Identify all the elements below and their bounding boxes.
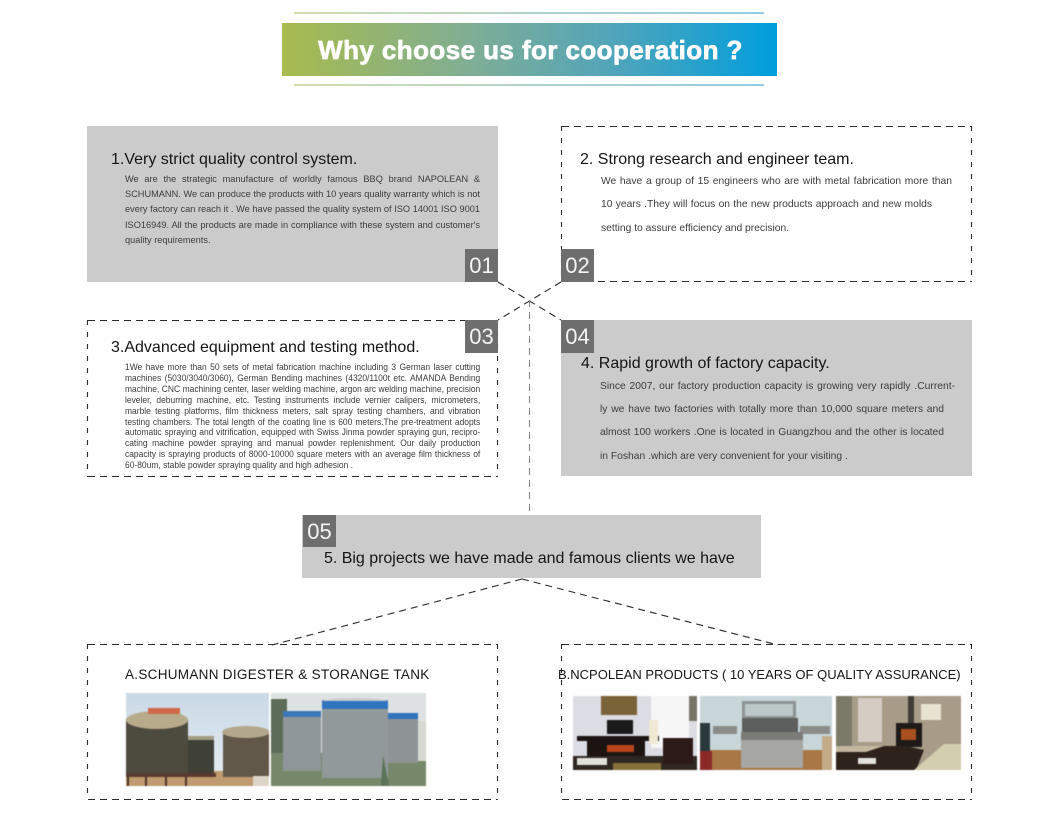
body text 1: SCHUMANN. We can produce the products with 10 years quality warranty which is not <box>125 189 480 200</box>
body text 1: ISO16949. All the products are made in compliance with these system and customer's <box>125 220 480 231</box>
body text 2 <box>601 176 952 234</box>
body text 1: every factory can reach it . We have passed the quality system of ISO 14001 ISO 9001 <box>125 204 480 215</box>
photo: stainless BBQ grill <box>699 696 833 771</box>
number 02: 02 <box>565 253 590 278</box>
body text 2: We have a group of 15 engineers who are with metal fabrication more than <box>601 176 952 187</box>
body text 3: cating machine powder spraying and manual powder replenishment. Our daily production <box>125 438 480 448</box>
body text 3: testing chambers. The total length of the coating line is 600 meters.The pre-treatment adopts <box>125 417 480 427</box>
number 03 <box>465 320 498 353</box>
panel 4: capacity <box>561 320 972 476</box>
number 03: 03 <box>469 324 494 349</box>
heading 2: 2. Strong research and engineer team. <box>580 151 854 168</box>
number 01: 01 <box>469 253 494 278</box>
number 04 <box>561 320 594 353</box>
heading B: B.NCPOLEAN PRODUCTS ( 10 YEARS OF QUALITY ASSURANCE) <box>558 667 961 682</box>
title banner <box>282 23 777 76</box>
heading 3: 3.Advanced equipment and testing method. <box>111 339 420 356</box>
number 01 <box>465 249 498 282</box>
number 05: 05 <box>307 519 332 544</box>
heading 4: 4. Rapid growth of factory capacity. <box>581 355 830 372</box>
body text 3: automatic spraying and vitrification, equipped with Swiss Jinma powder spraying gun, recipro- <box>125 427 480 437</box>
number 04: 04 <box>565 324 590 349</box>
number 02 <box>561 249 594 282</box>
body text 3 <box>125 362 480 470</box>
body text 4: almost 100 workers .One is located in Guangzhou and the other is located <box>600 427 944 438</box>
photo: electric fireplace room <box>572 695 698 771</box>
number 05 <box>303 515 336 547</box>
body text 3: 60-80um, stable powder spraying quality and high adhesion . <box>125 460 353 470</box>
heading A: A.SCHUMANN DIGESTER & STORANGE TANK <box>125 667 430 682</box>
body text 4: ly we have two factories with totally more than 10,000 square meters and <box>600 404 944 415</box>
body text 1: quality requirements. <box>125 235 211 246</box>
panel 5: big projects <box>302 515 761 578</box>
photo: dark steel tanks <box>125 692 270 787</box>
panel 1: quality control <box>87 126 498 282</box>
body text 4 <box>600 381 955 462</box>
body text 3: marble testing platforms, film thickness meters, salt spray testing chambers, and vibration <box>125 406 480 416</box>
heading 1: 1.Very strict quality control system. <box>111 151 357 168</box>
body text 3: machines (5030/3040/3060), German Bending machines (4320/1100t etc. AMANDA Bending <box>125 373 480 383</box>
bottom gradient rule <box>294 84 764 86</box>
body text 2: 10 years .They will focus on the new products approach and new molds <box>601 199 932 210</box>
body text 4: in Foshan .which are very convenient for your visiting . <box>600 451 848 462</box>
heading 5: 5. Big projects we have made and famous clients we have <box>324 550 735 567</box>
body text 4: Since 2007, our factory production capacity is growing very rapidly .Current- <box>600 381 955 392</box>
body text 1: We are the strategic manufacture of worldly famous BBQ brand NAPOLEAN & <box>125 174 480 185</box>
top gradient rule <box>294 12 764 14</box>
body text 3: leveler, deburring machine, etc. Testing instruments include vernier calipers, micrometers, <box>125 395 480 405</box>
body text 3: 1We have more than 50 sets of metal fabrication machine including 3 German laser cutting <box>125 362 480 372</box>
body text 1 <box>125 174 480 246</box>
body text 2: setting to assure efficiency and precision. <box>601 223 789 234</box>
title banner: Why choose us for cooperation ? <box>318 35 743 65</box>
panel 3: equipment <box>111 320 498 470</box>
panel 2: research team <box>561 151 952 282</box>
body text 3: capacity is spraying products of 8000-10000 square meters with an average film thickness of <box>125 449 480 459</box>
body text 3: machine, CNC machining center, laser welding machine, argon arc welding machine, precision <box>125 384 480 394</box>
photo: grey tanks with blue bands <box>270 692 427 787</box>
photo: wood stove living room <box>835 695 962 771</box>
